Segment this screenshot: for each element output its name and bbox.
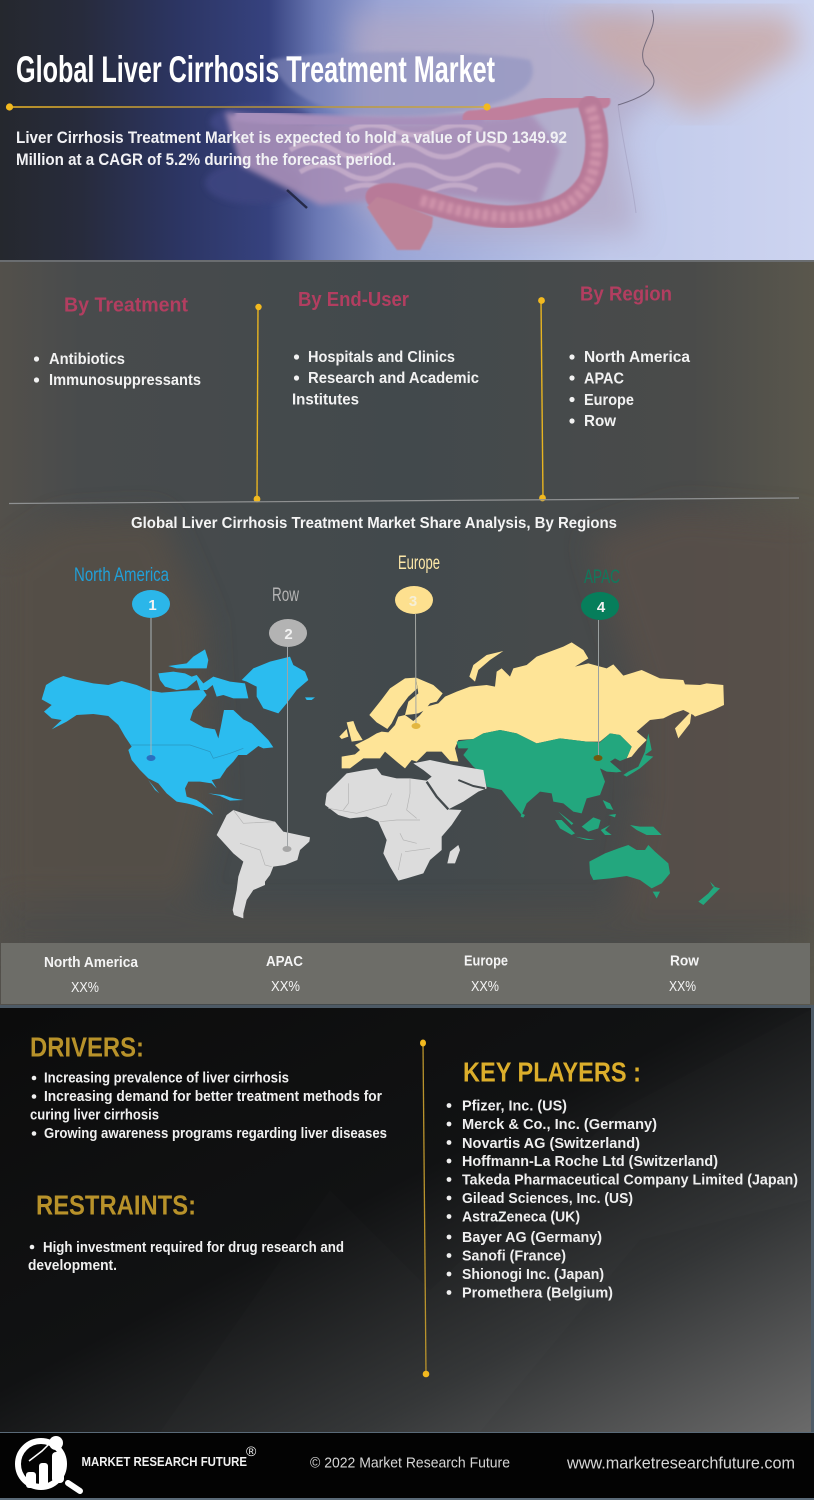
restraints list: High investment required for drug research and: [43, 1240, 344, 1256]
divider: left and right columns: [420, 1040, 429, 1377]
heading: By End-User: By End-User: [298, 289, 409, 311]
key players list: [447, 1098, 798, 1302]
region list: Row: [584, 413, 617, 430]
market summary text: Million at a CAGR of 5.2% during the forecast period.: [16, 151, 396, 169]
region list: Europe: [584, 392, 634, 409]
drivers list: curing liver cirrhosis: [30, 1108, 159, 1124]
pin 2: Row: 2: [284, 626, 293, 643]
divider: end-user and region: [538, 297, 546, 501]
treatment list: Immunosuppressants: [49, 372, 201, 389]
panel: By Treatment: [34, 294, 201, 389]
region list: North America: [584, 349, 690, 366]
table: market share by region: [1, 943, 810, 1004]
pin 4: APAC: [581, 567, 620, 761]
column: North America: XX%: [71, 980, 99, 996]
key players list: Takeda Pharmaceutical Company Limited (Japan): [462, 1172, 798, 1188]
panel: drivers, restraints and key players: [0, 1005, 814, 1432]
heading: By Treatment: By Treatment: [64, 294, 188, 316]
region: Europe and Russia: [339, 642, 724, 768]
drivers list: Increasing prevalence of liver cirrhosis: [44, 1070, 289, 1086]
key players list: Pfizer, Inc. (US): [462, 1098, 567, 1114]
column: Row: [669, 954, 700, 995]
pin 1: North America: North America: [74, 565, 169, 586]
restraints list: [28, 1240, 344, 1274]
market summary text: [16, 129, 567, 169]
region: Asia Pacific: [457, 730, 720, 905]
pin 3: Europe: 3: [409, 593, 417, 610]
key players list: Gilead Sciences, Inc. (US): [462, 1191, 633, 1207]
column: Row: Row: [670, 954, 700, 970]
region: North America: [42, 649, 315, 815]
header panel: [0, 0, 814, 260]
title: Global Liver Cirrhosis Treatment Market: [16, 49, 495, 90]
key players list: Novartis AG (Switzerland): [462, 1136, 640, 1152]
region list: APAC: [584, 370, 624, 388]
gold divider with end dots: [6, 103, 491, 111]
key players list: Merck & Co., Inc. (Germany): [462, 1117, 657, 1133]
end-user list: Institutes: [292, 392, 359, 408]
key players list: Bayer AG (Germany): [462, 1230, 602, 1246]
copyright: © 2022 Market Research Future: [310, 1454, 510, 1472]
region list: [569, 349, 690, 430]
column: Europe: Europe: [464, 954, 508, 970]
heading: By Region: By Region: [580, 284, 672, 306]
panel: market segments and map background: [0, 260, 814, 1006]
column: North America: [44, 955, 139, 996]
column: APAC: [266, 954, 303, 995]
key players list: Shionogi Inc. (Japan): [462, 1267, 604, 1283]
drivers list: [30, 1070, 387, 1142]
heading: Drivers: DRIVERS:: [30, 1032, 144, 1062]
treatment list: [34, 351, 201, 389]
heading: Restraints: RESTRAINTS:: [36, 1190, 196, 1220]
region: Rest of world: [217, 760, 487, 918]
pin 2: Row: Row: [272, 585, 299, 606]
pin 4: APAC: APAC: [584, 567, 620, 588]
pin 1: North America: [74, 565, 170, 761]
end-user list: Hospitals and Clinics: [308, 349, 455, 366]
column: APAC: APAC: [266, 954, 303, 970]
brand name: MARKET RESEARCH FUTURE: [82, 1455, 247, 1469]
drivers list: Increasing demand for better treatment methods for: [44, 1089, 382, 1105]
website: www.marketresearchfuture.com: [566, 1454, 795, 1472]
key players list: Promethera (Belgium): [462, 1286, 613, 1302]
market summary text: Liver Cirrhosis Treatment Market is expected to hold a value of USD 1349.92: [16, 129, 567, 147]
footer bar: [0, 1432, 814, 1500]
key players list: Sanofi (France): [462, 1248, 566, 1264]
drivers list: Growing awareness programs regarding liver diseases: [44, 1126, 387, 1142]
pin 2: Row: [269, 585, 307, 852]
column: North America: North America: [44, 955, 139, 971]
chart title: Global Liver Cirrhosis Treatment Market Share Analysis, By Regions: [131, 515, 617, 532]
world map: [42, 642, 724, 918]
pin 4: APAC: 4: [597, 599, 606, 616]
column: APAC: XX%: [271, 979, 300, 995]
panel: By End-User: [292, 289, 479, 408]
pin 3: Europe: [395, 553, 440, 729]
panel: By Region: [569, 284, 690, 430]
divider: treatment and end-user: [254, 304, 262, 502]
column: Europe: [464, 954, 508, 995]
key players list: AstraZeneca (UK): [462, 1210, 580, 1226]
restraints list: development.: [28, 1258, 117, 1274]
pin 1: North America: 1: [148, 597, 157, 614]
column: Europe: XX%: [471, 979, 499, 995]
column: Row: XX%: [669, 979, 696, 995]
key players list: Hoffmann-La Roche Ltd (Switzerland): [462, 1154, 718, 1170]
registered mark: ®: [246, 1443, 257, 1459]
illustration: torso and intestines: [205, 10, 800, 250]
icon: market research logo: [18, 1436, 80, 1491]
heading: Key Players: KEY PLAYERS :: [463, 1056, 641, 1088]
pin 3: Europe: Europe: [398, 553, 440, 574]
treatment list: Antibiotics: [49, 351, 125, 368]
end-user list: Research and Academic: [308, 370, 479, 387]
end-user list: [292, 349, 479, 408]
